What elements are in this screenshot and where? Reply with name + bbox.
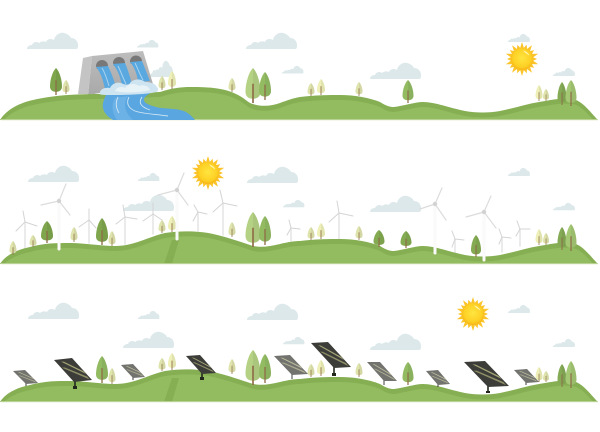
terrain	[0, 87, 598, 120]
small wind turbines behind hills	[16, 190, 530, 254]
water foam	[100, 80, 158, 95]
sun	[505, 42, 539, 76]
large wind turbines	[41, 173, 496, 260]
sun	[191, 156, 225, 190]
trees	[96, 350, 576, 388]
terrain	[0, 369, 598, 402]
trees	[10, 212, 576, 257]
panel: wind farm landscape	[0, 156, 600, 272]
panel: hydroelectric dam landscape	[0, 33, 600, 128]
trees	[50, 68, 576, 106]
panel: solar farm landscape	[0, 297, 600, 410]
clouds	[28, 303, 575, 350]
river	[103, 89, 195, 120]
terrain	[0, 231, 598, 264]
clouds	[27, 33, 575, 79]
clouds	[28, 166, 575, 212]
sun	[456, 297, 490, 331]
hydro dam	[78, 51, 153, 95]
solar panels	[13, 342, 539, 393]
